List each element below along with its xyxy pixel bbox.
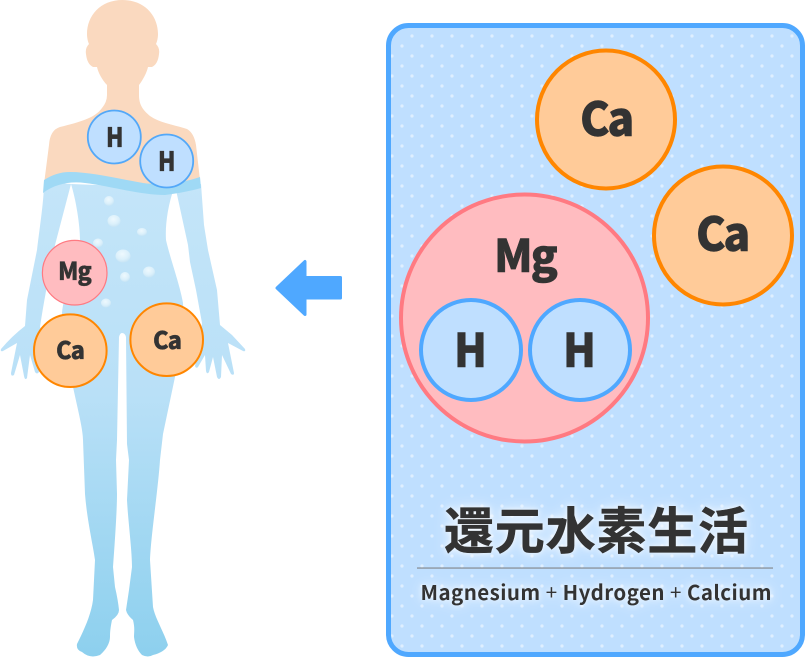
- circle: Ca on left hip: [34, 314, 107, 387]
- circle: H on chest left: [88, 110, 141, 164]
- subtitle: Magnesium + Hydrogen + Calcium: [420, 576, 772, 606]
- circle: Ca top: [537, 50, 675, 188]
- bubbles in the body: [93, 196, 155, 308]
- divider line: [417, 567, 773, 569]
- circle: H on chest right: H: [158, 140, 176, 179]
- circle: H on chest right: [140, 134, 193, 188]
- body: water-filled torso, arms and legs: [1, 182, 245, 656]
- circle: H right: [530, 300, 630, 400]
- body: skin head and shoulders: [44, 0, 200, 188]
- circle: Ca top: Ca: [580, 81, 632, 150]
- heading: 還元水素生活: [444, 492, 748, 564]
- circle: Ca right: Ca: [696, 196, 748, 265]
- circle: H left: [421, 300, 521, 400]
- panel dot pattern: [391, 28, 800, 652]
- panel background: [388, 26, 802, 654]
- circle: H left: H: [454, 315, 487, 381]
- circle: H right: H: [563, 315, 596, 381]
- circle: Ca on right hip: Ca: [153, 321, 181, 356]
- circle: H on chest left: H: [106, 116, 124, 155]
- circle: Mg on body: Mg: [58, 252, 92, 288]
- circle: Ca on right hip: [130, 303, 203, 376]
- arrow pointing to the body: [277, 262, 340, 314]
- panel: hydrogen life: [388, 26, 802, 654]
- circle: Mg with two H: [401, 194, 648, 442]
- body: water surface band: [43, 172, 201, 195]
- circle: Ca on left hip: Ca: [56, 331, 84, 366]
- circle: Mg on body: [42, 240, 107, 305]
- circle: Ca right: [654, 166, 792, 304]
- circle: Mg with two H: Mg: [494, 220, 557, 285]
- figure: human body: [1, 0, 245, 656]
